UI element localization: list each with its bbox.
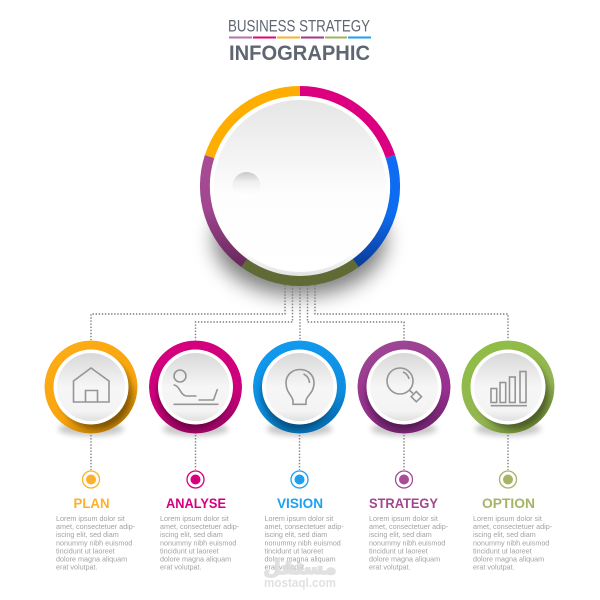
strategy body text: erat volutpat. bbox=[369, 563, 411, 572]
vision shadow bbox=[266, 422, 332, 436]
plan body text: Lorem ipsum dolor sit bbox=[56, 514, 125, 523]
option body text: erat volutpat. bbox=[473, 563, 515, 572]
step 4: strategy bbox=[358, 340, 450, 572]
vision body text: erat volutpat. bbox=[264, 563, 306, 572]
vision connector bbox=[298, 435, 300, 470]
vision disc bbox=[262, 350, 337, 424]
vision body text: Lorem ipsum dolor sit bbox=[264, 514, 333, 523]
option body text: nonummy nibh euismod bbox=[473, 538, 549, 547]
strategy heading: STRATEGY bbox=[369, 495, 439, 511]
strategy body text: nonummy nibh euismod bbox=[369, 538, 445, 547]
vision body text: dolore magna aliquam bbox=[264, 554, 336, 564]
main circle shadow bbox=[214, 184, 386, 296]
plan body text: erat volutpat. bbox=[56, 563, 98, 572]
option body text bbox=[473, 514, 553, 572]
title line: infographic: INFOGRAPHIC bbox=[229, 42, 370, 65]
analyse body text: amet, consectetuer adip- bbox=[160, 522, 240, 531]
white disc bbox=[210, 96, 390, 276]
connector lines bbox=[91, 285, 508, 340]
plan ring bbox=[44, 340, 138, 434]
analyse body text: dolore magna aliquam bbox=[160, 554, 231, 564]
strategy body text: Lorem ipsum dolor sit bbox=[369, 514, 438, 523]
analyse connector bbox=[194, 435, 196, 470]
analyse body text: Lorem ipsum dolor sit bbox=[160, 514, 229, 523]
strategy connector bbox=[403, 435, 405, 470]
analyse body text: iscing elit, sed diam bbox=[160, 530, 223, 539]
icon: bar chart bbox=[491, 372, 527, 406]
strategy body text: tincidunt ut laoreet bbox=[369, 546, 428, 555]
plan body text: dolore magna aliquam bbox=[56, 554, 127, 564]
strategy body text bbox=[369, 514, 449, 572]
option heading: OPTION bbox=[482, 495, 535, 511]
strategy disc bbox=[366, 350, 442, 424]
vision heading: VISION bbox=[277, 495, 323, 511]
icon: light bulb bbox=[286, 370, 314, 404]
analyse body text: erat volutpat. bbox=[160, 563, 202, 572]
step 3: vision bbox=[253, 340, 346, 572]
option body text: dolore magna aliquam bbox=[473, 554, 544, 564]
strategy body text: iscing elit, sed diam bbox=[369, 530, 432, 539]
plan body text: iscing elit, sed diam bbox=[56, 530, 119, 539]
plan body text: nonummy nibh euismod bbox=[56, 538, 132, 547]
analyse ring bbox=[149, 340, 242, 434]
option body text: amet, consectetuer adip- bbox=[473, 522, 553, 531]
strategy ring bbox=[358, 340, 450, 434]
option body text: iscing elit, sed diam bbox=[473, 530, 536, 539]
plan connector bbox=[90, 435, 92, 470]
option marker bbox=[500, 471, 516, 488]
analyse disc bbox=[158, 350, 233, 424]
plan body text: amet, consectetuer adip- bbox=[56, 522, 136, 531]
plan disc bbox=[54, 350, 128, 424]
vision body text bbox=[264, 514, 344, 572]
vision body text: amet, consectetuer adip- bbox=[264, 522, 344, 531]
watermark arabic: مستقل bbox=[263, 555, 337, 579]
vision body text: tincidunt ut laoreet bbox=[264, 546, 323, 555]
option body text: Lorem ipsum dolor sit bbox=[473, 514, 542, 523]
option ring bbox=[462, 340, 554, 434]
strategy body text: amet, consectetuer adip- bbox=[369, 522, 449, 531]
indent marker bbox=[232, 172, 260, 200]
option disc bbox=[470, 350, 546, 424]
option connector bbox=[507, 435, 509, 470]
ring segments bbox=[205, 91, 395, 281]
main segmented circle bbox=[205, 91, 395, 281]
step 1: plan bbox=[44, 340, 138, 572]
option body text: tincidunt ut laoreet bbox=[473, 546, 532, 555]
analyse marker bbox=[187, 471, 204, 488]
watermark latin: mostaql.com bbox=[264, 576, 336, 590]
vision ring bbox=[253, 340, 346, 434]
title colour bars bbox=[229, 36, 371, 38]
analyse body text: tincidunt ut laoreet bbox=[160, 546, 219, 555]
plan marker bbox=[82, 471, 100, 488]
icon: person reclining bbox=[174, 370, 218, 404]
title bbox=[228, 18, 371, 65]
strategy body text: dolore magna aliquam bbox=[369, 554, 440, 564]
step 2: analyse bbox=[149, 340, 242, 572]
watermark bbox=[263, 555, 337, 590]
icon: house bbox=[74, 368, 109, 402]
plan heading: PLAN bbox=[74, 495, 110, 511]
plan body text bbox=[56, 514, 136, 572]
strategy shadow bbox=[371, 422, 437, 436]
strategy marker bbox=[396, 471, 412, 488]
analyse heading: ANALYSE bbox=[166, 495, 226, 511]
icon: magnifier bbox=[387, 368, 422, 402]
title line: business strategy: BUSINESS STRATEGY bbox=[228, 18, 370, 36]
plan shadow bbox=[58, 422, 124, 436]
analyse body text bbox=[160, 514, 240, 572]
step 5: option bbox=[462, 340, 554, 572]
analyse body text: nonummy nibh euismod bbox=[160, 538, 236, 547]
vision body text: iscing elit, sed diam bbox=[264, 530, 327, 539]
vision body text: nonummy nibh euismod bbox=[264, 538, 341, 547]
plan body text: tincidunt ut laoreet bbox=[56, 546, 115, 555]
option shadow bbox=[475, 422, 541, 436]
vision marker bbox=[291, 471, 308, 488]
analyse shadow bbox=[162, 422, 228, 436]
